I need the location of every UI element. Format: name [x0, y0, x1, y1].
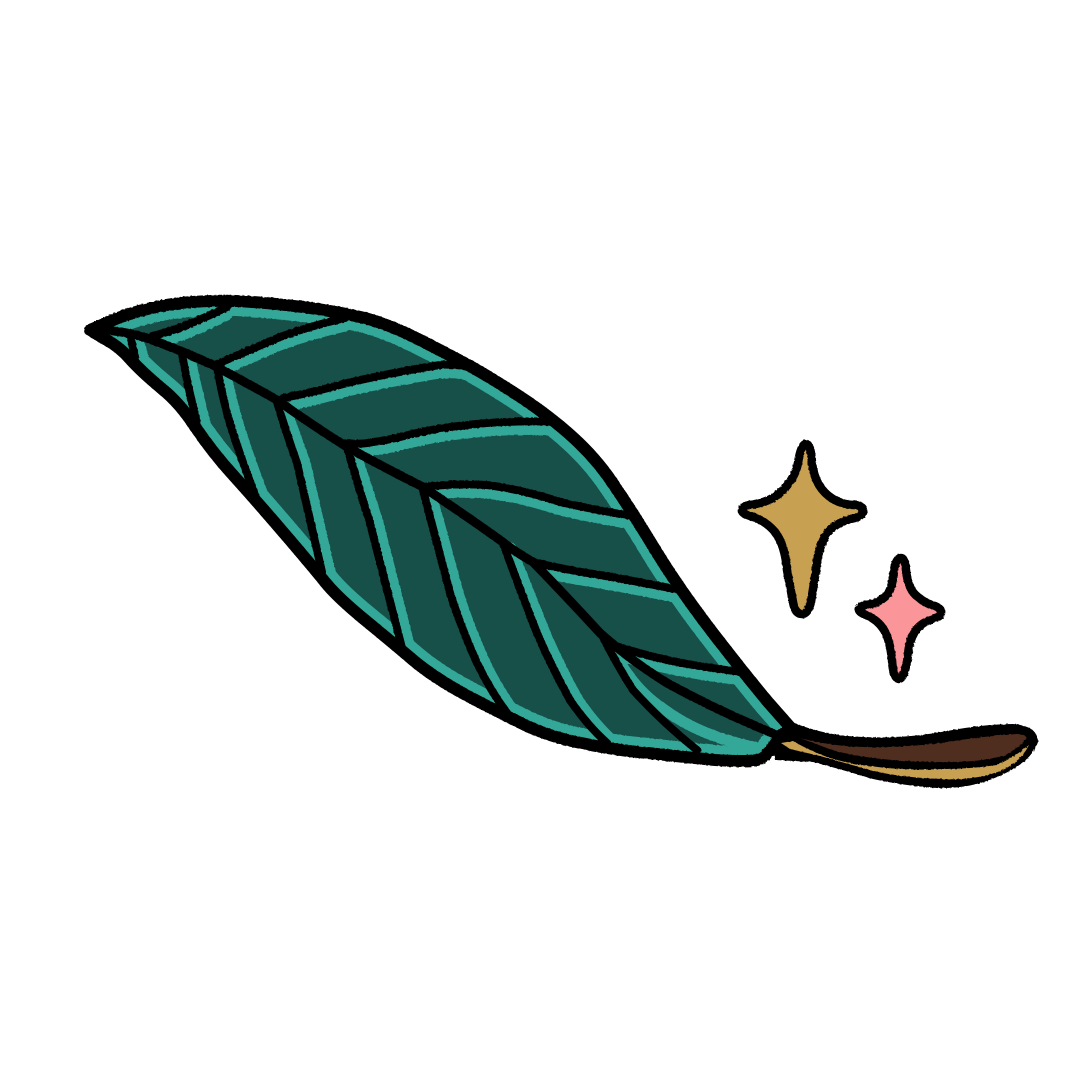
teal highlights — [90, 301, 790, 761]
leaf outline — [90, 301, 790, 761]
stem outline — [772, 722, 1038, 788]
stem brown — [800, 734, 1026, 762]
leaf — [90, 301, 1038, 788]
stem gold — [781, 741, 1029, 779]
leaf blade fill — [90, 301, 790, 761]
sparkle: gold star — [742, 444, 863, 614]
veins — [97, 307, 777, 750]
stem — [772, 722, 1038, 788]
illustration: leaf with sparkles — [84, 294, 1038, 789]
sparkle: pink star — [859, 558, 941, 679]
